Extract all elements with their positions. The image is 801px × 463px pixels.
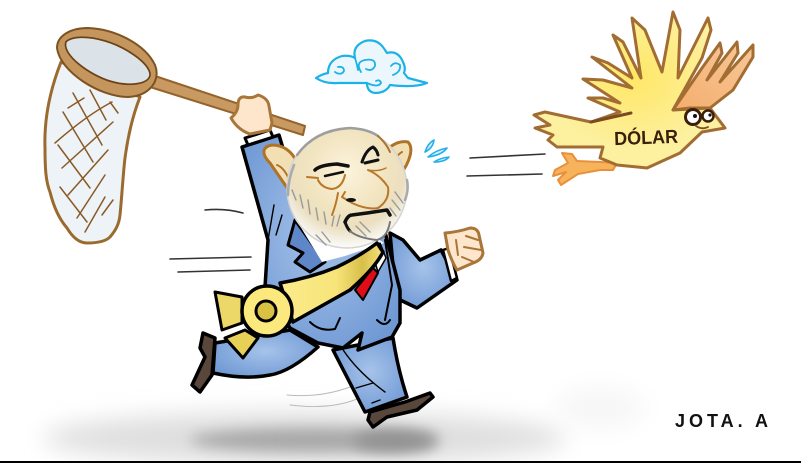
red tie (355, 268, 378, 300)
president (192, 95, 483, 427)
lapel (288, 220, 325, 272)
raised cuff (245, 130, 273, 145)
right fist (445, 228, 483, 270)
signature: JOTA. A (675, 411, 768, 431)
orange wing (673, 42, 753, 110)
right sleeve (390, 233, 457, 308)
jacket pockets (310, 318, 390, 330)
net bag (45, 62, 140, 243)
beard strokes (292, 190, 403, 245)
net mesh (55, 90, 118, 232)
grey hair top (297, 128, 378, 155)
butterfly net (45, 28, 305, 243)
speed lines (170, 154, 545, 407)
front leg (333, 338, 407, 412)
net opening (66, 37, 150, 84)
beak smile (696, 126, 708, 128)
right cuff (443, 248, 457, 281)
sash tails (215, 292, 242, 330)
bird body and feathers (534, 12, 725, 168)
glasses and nose (307, 168, 388, 215)
eyes (686, 110, 714, 124)
white shirt (300, 226, 384, 262)
wing edge (591, 113, 631, 122)
nostril (346, 198, 356, 202)
rosette (242, 286, 292, 336)
raised arm crease (268, 205, 282, 240)
sweat drops (425, 140, 449, 162)
head (287, 128, 407, 248)
net handle (150, 76, 305, 135)
sash (280, 243, 383, 322)
label: DÓLAR: DÓLAR (614, 126, 679, 150)
rear leg (213, 330, 318, 377)
head brown edge (378, 136, 390, 152)
right ear (385, 142, 411, 175)
ground shadow (43, 388, 645, 463)
rear shoe (192, 333, 215, 392)
jacket (242, 135, 400, 350)
bird: dólar (534, 12, 753, 185)
net ring (57, 28, 157, 97)
left ear (264, 145, 297, 192)
eyebrows and eyes (315, 147, 378, 176)
bottom border (0, 461, 801, 463)
mouth and chin (345, 210, 390, 240)
bird feet (553, 153, 617, 185)
front shoe (368, 393, 433, 427)
raised hand (231, 95, 272, 134)
cloud (316, 40, 427, 93)
